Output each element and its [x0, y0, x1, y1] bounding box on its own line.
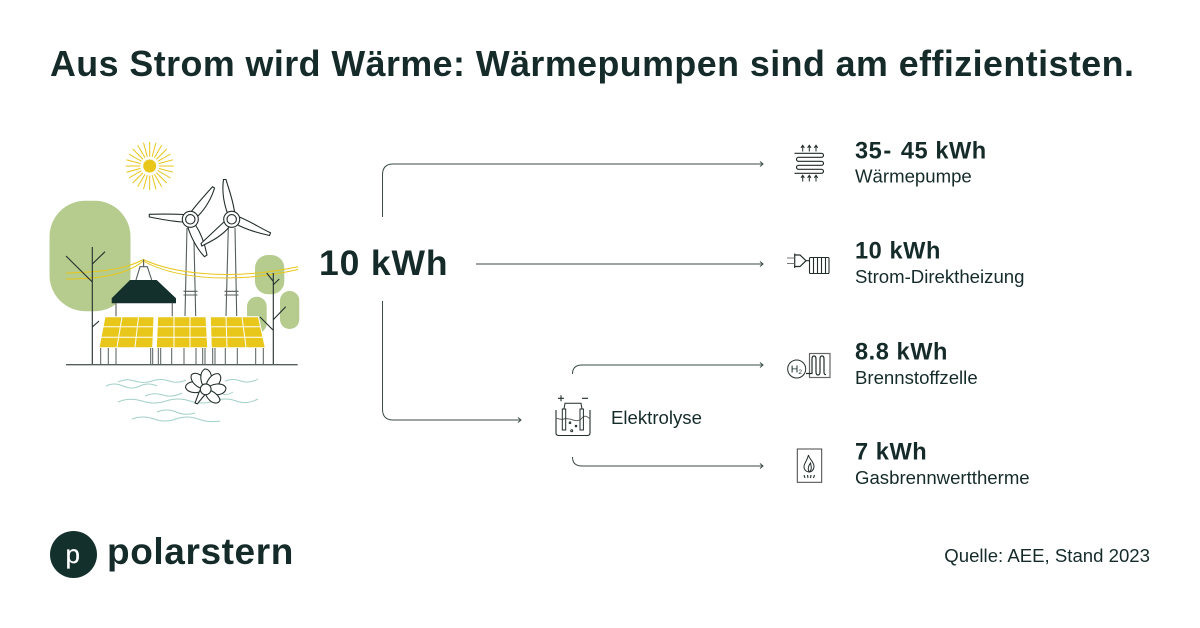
icon: electrolysis	[556, 395, 590, 436]
panel legs and ground	[66, 348, 298, 365]
title: Aus Strom wird Wärme: Wärmepumpen sind am effizientisten.	[50, 44, 1134, 84]
result: Brennstoffzelle	[855, 340, 978, 388]
result: Strom-Direktheizung: 10 kWh	[855, 238, 941, 264]
water turbine	[184, 368, 227, 406]
power lines	[66, 260, 298, 279]
arrow: to Strom-Direktheizung	[476, 263, 763, 265]
water waves	[106, 379, 258, 422]
logo: polarstern	[50, 531, 294, 578]
logo: polarstern: polarstern	[107, 531, 294, 572]
sun	[126, 142, 174, 190]
pylon	[136, 260, 152, 280]
icon: hydrogen fuel cell: 2	[798, 369, 802, 376]
tree branches	[66, 247, 286, 364]
result: Strom-Direktheizung: Strom-Direktheizung	[855, 266, 1024, 287]
icon: gas boiler flame	[797, 449, 822, 482]
main value: 10 kWh	[319, 243, 448, 283]
result: Strom-Direktheizung	[855, 238, 1024, 287]
trees background	[50, 201, 299, 333]
result: Wärmepumpe: 35- 45 kWh	[855, 138, 987, 164]
arrow: to Brennstoffzelle	[572, 365, 763, 374]
icon: plug and radiator	[787, 254, 829, 274]
logo: polarstern: p	[66, 539, 80, 569]
arrow: to Elektrolyse	[382, 301, 521, 420]
icon: hydrogen fuel cell	[788, 354, 830, 378]
house roof	[112, 280, 176, 303]
label: Elektrolyse: Elektrolyse	[611, 407, 702, 428]
illustration: renewable energy landscape	[50, 142, 299, 422]
result: Wärmepumpe	[855, 138, 987, 186]
wind turbines	[149, 180, 270, 316]
arrow: to Wärmepumpe	[382, 164, 763, 217]
result: Brennstoffzelle: Brennstoffzelle	[855, 367, 978, 388]
result: Gasbrennwerttherme	[855, 440, 1030, 488]
result: Brennstoffzelle: 8.8 kWh	[855, 340, 948, 366]
result: Gasbrennwerttherme: 7 kWh	[855, 440, 927, 466]
solar panels	[99, 317, 265, 348]
source note: Quelle: AEE, Stand 2023	[944, 545, 1150, 566]
result: Gasbrennwerttherme: Gasbrennwerttherme	[855, 467, 1030, 488]
icon: heat pump coil	[794, 145, 824, 182]
result: Wärmepumpe: Wärmepumpe	[855, 166, 972, 186]
arrow: to Gasbrennwerttherme	[572, 457, 763, 466]
icon: hydrogen fuel cell: H	[791, 364, 798, 376]
